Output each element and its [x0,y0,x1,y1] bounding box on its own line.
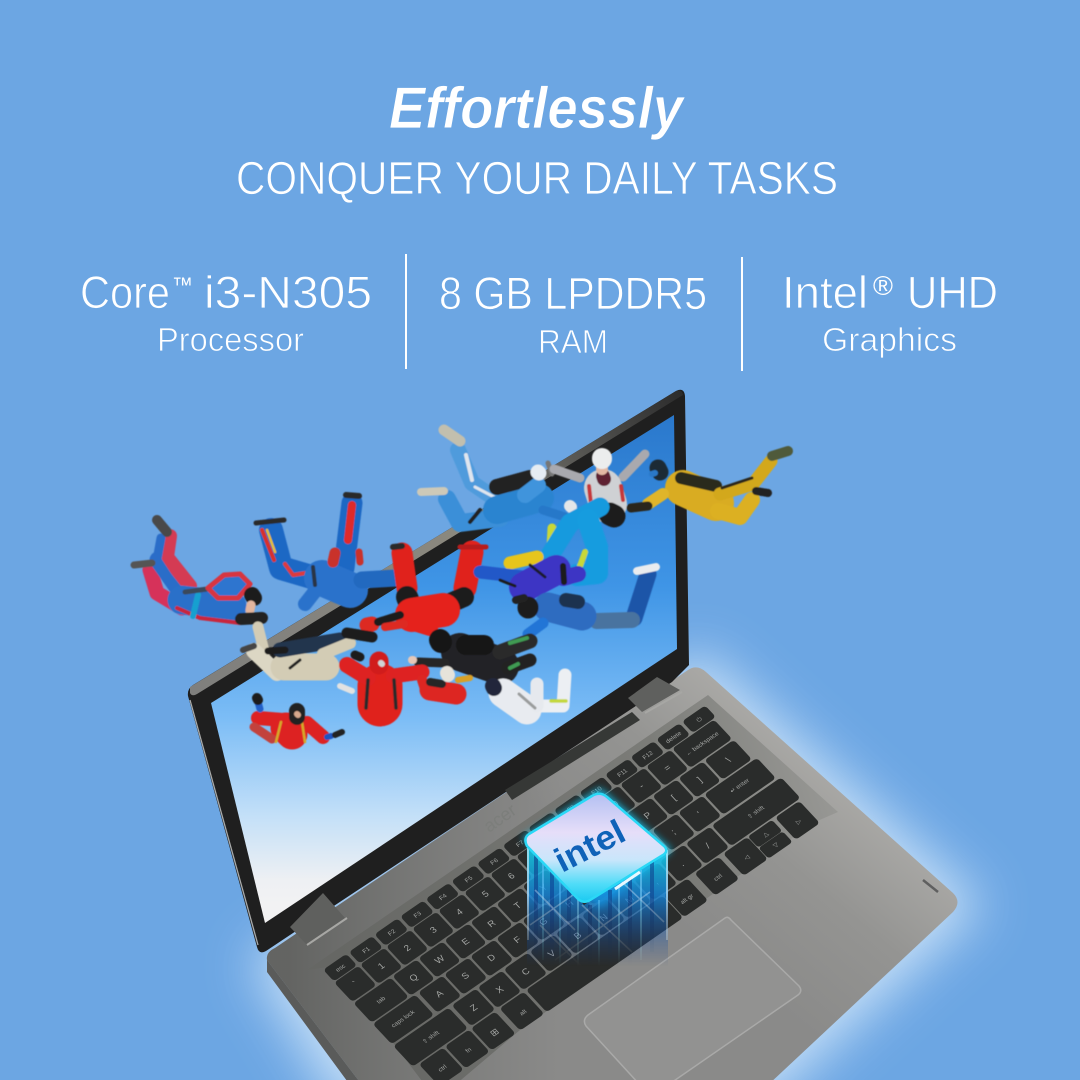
qwerty row: Y [538,882,550,893]
home row: ; [669,827,678,836]
home row: ' [695,810,704,818]
qwerty row: tab [375,995,388,1005]
number row: ` [351,979,360,988]
home row: J [590,881,601,891]
function row: F11 [616,767,630,779]
shift row: C [520,966,532,977]
number row: 6 [506,871,517,881]
shift row: N [598,912,610,923]
lid top rim [190,390,683,695]
spec: RAM: RAM [538,323,608,360]
diver: red with black knees [367,546,486,628]
diver: white suit [493,675,566,710]
qwerty row: ] [695,775,704,784]
number row [335,720,731,1001]
number row: 0 [610,799,621,809]
hinge left [290,893,347,945]
keyboard [324,703,821,1080]
qwerty row: R [486,918,498,929]
home row: caps lock [390,1009,417,1029]
function row: esc [334,963,347,974]
home row: ↵ enter [729,777,751,795]
diver: red and blue left [134,520,262,623]
number row: = [662,763,673,773]
qwerty row: E [460,936,472,947]
function row: F8 [540,822,552,831]
home row: L [642,845,653,855]
bottom row: ▽ [772,841,780,849]
home row: H [563,898,576,909]
qwerty row: Q [407,972,420,983]
bottom row: alt [518,1008,529,1017]
shift row [394,778,799,1066]
speaker grille [505,712,640,800]
number row: ← backspace [684,730,721,757]
column streaks [527,848,668,960]
shift row: M [623,894,636,905]
home row: G [537,916,550,927]
spec: processor [80,267,372,358]
number row: 1 [376,961,387,971]
spec: graphics: Graphics [822,321,957,358]
base deck [267,667,957,1080]
bottom row: ctrl [437,1064,449,1073]
bottom row: alt gr [679,893,695,906]
touchpad [584,917,801,1080]
function row: F9 [566,804,577,813]
spec: graphics [782,267,998,358]
bottom row: fn [464,1046,474,1055]
function row: F12 [641,750,655,761]
divider two [741,257,743,371]
subtitle: CONQUER YOUR DAILY TASKS [236,152,838,204]
chip lower highlight [615,872,640,889]
home row: K [615,862,628,873]
bottom row: ⊞ [488,1027,501,1038]
qwerty row: I [591,847,600,856]
shift row: ⇧ shift [746,805,766,820]
spec: processor: i3-N305 [204,267,372,318]
function row: F10 [590,785,604,797]
spec: graphics: ® [873,271,893,301]
shift row: B [572,930,584,941]
number row: 2 [402,943,413,953]
laptop lid [188,390,689,952]
diver: blue right [516,567,656,634]
home row: S [459,970,471,981]
spec: processor: Processor [157,321,304,358]
column grid lines [530,882,664,958]
title: Effortlessly: Effortlessly [389,76,686,141]
shift row: V [546,948,558,959]
qwerty row: P [642,810,654,821]
diver: white helmet [554,454,645,516]
light column [527,848,668,962]
spec: processor: ™ [172,274,193,297]
bottom row: ▷ [795,818,803,826]
qwerty row: T [512,900,524,911]
function row: F7 [515,839,526,849]
bottom row: ctrl [713,873,724,883]
qwerty row: \ [724,755,733,764]
hinge right [628,677,682,713]
home row: A [433,988,446,999]
chip top face [525,794,666,902]
divider one [405,254,407,369]
function row: F2 [387,928,398,937]
qwerty row: [ [669,793,678,802]
function row: ⏻ [695,716,704,724]
lid left edge highlight [190,700,258,945]
spec: graphics: Intel [782,267,868,318]
function row: F4 [438,892,449,902]
diver: black centre [412,638,530,668]
keyboard recess [307,695,838,1080]
acer logo: acer [480,800,520,836]
shift row: Z [468,1002,480,1013]
qwerty row [355,741,751,1022]
diver: red low [254,698,342,742]
intel logo: intel [548,813,632,880]
diver: red harness [340,655,422,708]
number row: 9 [584,817,595,827]
diver: white and khaki [243,627,372,673]
shift row: ⇧ shift [421,1030,441,1045]
diver: blue with red stripe [256,495,396,604]
home row [374,759,775,1043]
number row: 5 [480,889,491,899]
number row: 3 [428,925,439,935]
shift row: X [494,984,506,995]
status light [923,880,938,892]
lid body [188,390,689,952]
diver: small red [422,673,470,694]
screen [211,415,677,923]
intel chip [522,788,672,975]
diver: blue top [421,430,571,523]
spec: graphics: UHD [907,267,998,318]
bottom row [420,802,819,1080]
number row: 7 [532,853,543,863]
qwerty row: W [433,953,447,966]
spec: RAM [439,268,707,360]
function row [324,706,715,980]
diver: cyan and purple [480,507,600,587]
laptop glow [250,650,985,1080]
spec: RAM: 8 GB LPDDR5 [439,268,707,319]
spec: processor: Core [80,267,170,318]
shift row: / [703,841,713,850]
function row: F5 [464,875,475,884]
home row: D [485,952,498,963]
number row: 8 [558,835,569,845]
bottom row: ◁ [743,854,751,862]
qwerty row: U [564,864,576,875]
function row: F3 [412,910,424,920]
shift row: , [651,877,660,886]
base side edge [267,960,362,1080]
shift row: . [677,859,686,868]
number row: 4 [454,907,465,917]
skydivers [134,430,788,742]
laptop [188,390,957,1080]
qwerty row: O [615,828,628,839]
home row: F [512,934,523,945]
function row: delete [664,730,684,745]
diver: yellow [631,451,788,517]
deck left shade [267,755,560,1080]
bottom row: △ [762,831,770,839]
function row: F6 [489,857,500,867]
chip glow [522,788,672,908]
function row: F1 [361,946,372,955]
number row: - [637,781,646,790]
